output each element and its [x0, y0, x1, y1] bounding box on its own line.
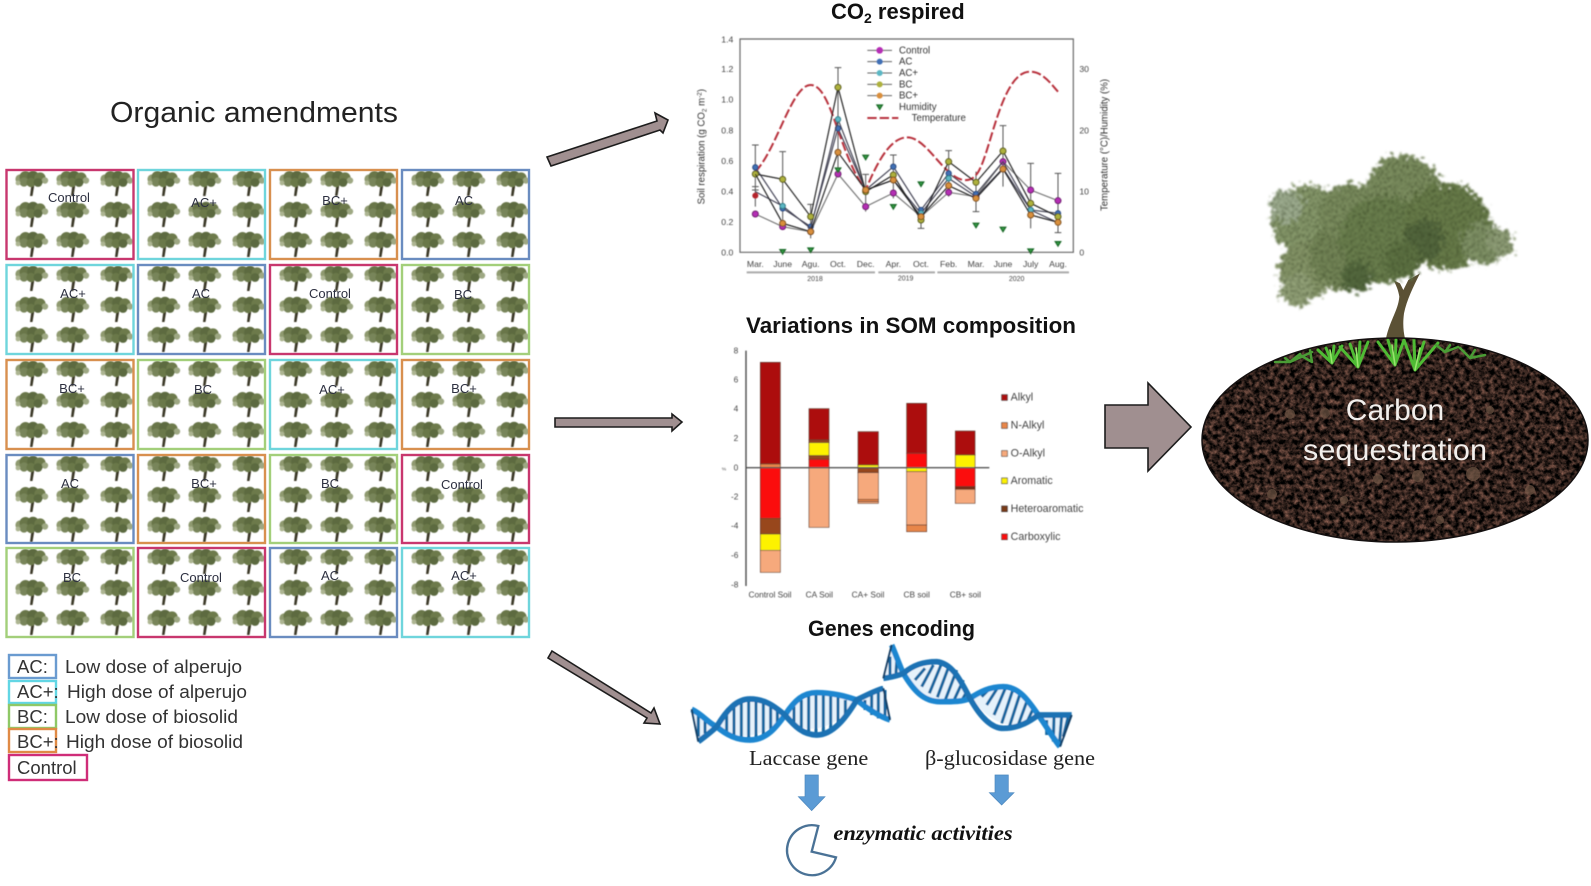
legend: Temperature: [912, 113, 966, 124]
legend: Control: [899, 45, 930, 56]
icon: enzyme pacman: [787, 825, 836, 875]
y axis: 6: [734, 374, 739, 384]
plot: BC r5c1: BC: [63, 570, 81, 585]
x axis labels: Dec.: [857, 259, 875, 269]
plot: Control r5c2: [138, 548, 265, 637]
red point: [752, 193, 758, 199]
x axis labels: Aug.: [1049, 259, 1067, 269]
legend: treatments: AC:: [17, 656, 48, 677]
axis titles: Soil respiration (g CO: [697, 112, 708, 204]
series: BC+: [755, 149, 1061, 235]
series: Humidity: [780, 155, 1061, 254]
axis titles: Temperature (°C)/Humidity (%): [1100, 79, 1111, 211]
x axis labels: Apr.: [886, 259, 901, 269]
y axis: 2: [734, 433, 739, 443]
label: enzymatic activities: enzymatic activities: [833, 823, 1013, 845]
y axis ticks: 1.0: [721, 95, 734, 105]
y axis ticks: 1.4: [721, 34, 734, 44]
plot: AC r2c2: [138, 265, 265, 354]
plot: AC+ r5c4: [402, 548, 529, 637]
arrow: glucosidase down: [989, 775, 1014, 805]
y axis ticks: 0.2: [721, 217, 734, 227]
y axis ticks: [721, 34, 1089, 257]
legend: AC+: [899, 68, 918, 79]
plot: BC+ r3c4: BC+: [451, 381, 477, 396]
plot: Control r4c4: [402, 455, 529, 543]
x axis labels: 2018: [807, 276, 823, 283]
x axis labels: June: [994, 259, 1013, 269]
arrow: Laccase down: [798, 775, 825, 811]
x axis labels: 2019: [898, 275, 914, 282]
y axis: [722, 345, 746, 590]
legend: treatments: BC+:: [17, 731, 59, 752]
legend: treatments: [9, 655, 247, 780]
y axis: %: [722, 466, 727, 472]
chart: soil respiration line chart: [697, 34, 1111, 283]
plot: AC r2c2: AC: [192, 286, 210, 301]
x axis labels: Agu.: [802, 259, 820, 269]
plot: Control r2c3: Control: [309, 286, 351, 301]
y axis: -2: [731, 491, 739, 501]
bar: CB soil: [907, 403, 927, 532]
plot: AC+ r5c4: AC+: [451, 568, 477, 583]
heading: CO2 respired: 2: [864, 10, 872, 26]
zero line: [746, 466, 989, 470]
plot: AC+ r1c2: [138, 170, 265, 259]
plot: Control r2c3: [270, 265, 397, 354]
legend: BC: [899, 79, 912, 90]
x axis labels: Mar.: [747, 259, 764, 269]
plot: BC r5c1: [6, 548, 134, 637]
plot: AC r1c4: [402, 170, 529, 259]
legend: treatments: High dose of alperujo: [67, 681, 247, 702]
legend: [1002, 392, 1084, 543]
y axis ticks: 0.8: [721, 125, 734, 135]
panel: field plot grid: [6, 170, 529, 637]
legend: Carboxylic: [1011, 531, 1061, 543]
plot: AC+ r3c3: [270, 360, 397, 449]
axis titles: ): [697, 89, 708, 92]
y axis: 4: [734, 404, 739, 414]
y axis ticks: 0: [1079, 247, 1084, 257]
plot: AC r1c4: AC: [455, 193, 473, 208]
plot: Control r5c2: Control: [180, 570, 222, 585]
heading: Variations in SOM composition: Variations in SOM composition: [746, 313, 1076, 338]
legend: Heteroaromatic: [1011, 503, 1084, 515]
arrow: to SOM composition: [555, 414, 682, 431]
x axis labels: Oct.: [913, 259, 929, 269]
x axis labels: 2020: [1009, 276, 1025, 283]
icon: DNA helix laccase: [692, 688, 890, 742]
legend: Humidity: [899, 102, 937, 113]
x labels: CB+ soil: [950, 590, 981, 600]
plot: BC+ r3c4: [402, 360, 529, 449]
legend: O-Alkyl: [1011, 448, 1045, 460]
legend: N-Alkyl: [1011, 420, 1044, 432]
plot: BC+ r4c2: [138, 455, 265, 543]
heading: Genes encoding: Genes encoding: [808, 616, 975, 641]
plot: AC+ r2c1: AC+: [60, 286, 86, 301]
plot: AC+ r1c2: AC+: [191, 195, 217, 210]
legend: treatments: Low dose of alperujo: [65, 656, 242, 677]
label: Laccase gene: Laccase gene: [749, 748, 868, 770]
y axis: 0: [734, 462, 739, 472]
plot: BC r3c2: BC: [194, 382, 212, 397]
y axis ticks: 0.6: [721, 156, 734, 166]
plot: BC r2c4: [402, 265, 529, 354]
x axis labels: Oct.: [830, 259, 846, 269]
plot: Control r1c1: [6, 170, 134, 259]
y axis: -6: [731, 550, 739, 560]
x labels: CB soil: [903, 590, 930, 600]
series: BC: [752, 84, 1061, 223]
illustration: soil ellipse: [1195, 335, 1591, 547]
arrow: to carbon sequestration: [1105, 383, 1191, 471]
y axis ticks: 30: [1079, 64, 1089, 74]
plot: AC+ r3c3: AC+: [319, 382, 345, 397]
legend: BC+: [899, 91, 918, 102]
plot: BC+ r3c1: BC+: [59, 381, 85, 396]
plot: Control r1c1: Control: [48, 190, 90, 205]
axis titles: m: [697, 98, 708, 109]
legend: AC: [899, 57, 912, 68]
bar: CA+ Soil: [858, 432, 878, 503]
tree canopy: [1270, 155, 1513, 307]
x labels: Control Soil: [748, 590, 792, 600]
bar: CA Soil: [809, 409, 829, 527]
y axis ticks: 0.4: [721, 186, 734, 196]
chart: SOM composition stacked bars: [722, 345, 1084, 600]
plot: BC+ r3c1: [6, 360, 134, 449]
y axis: -4: [731, 521, 739, 531]
legend: Alkyl: [1011, 392, 1033, 404]
grass: [1275, 340, 1485, 370]
y axis ticks: 0.0: [721, 247, 734, 257]
panel: genes: [692, 645, 1095, 875]
tree trunk: [1386, 273, 1420, 338]
icon: DNA helix beta-glucosidase: [883, 645, 1072, 747]
plot: AC r5c3: AC: [321, 568, 339, 583]
arrow: to CO2 respired: [547, 113, 668, 166]
y axis ticks: 20: [1079, 125, 1089, 135]
temperature line: [755, 72, 1058, 190]
label: beta-glucosidase gene: β-glucosidase gene: [925, 748, 1095, 770]
bar: CB+ soil: [955, 431, 975, 503]
x labels: CA+ Soil: [852, 590, 884, 600]
plot frame: [740, 39, 1073, 252]
arrow: to genes encoding: [548, 651, 660, 724]
label: Carbon sequestration: [1303, 394, 1487, 467]
legend: treatments: Low dose of biosolid: [65, 706, 238, 727]
plot: BC+ r4c2: BC+: [191, 476, 217, 491]
plot: Control r4c4: Control: [441, 477, 483, 492]
legend: treatments: Control: [17, 757, 77, 778]
series: Control: [752, 159, 1061, 235]
axis titles: 2: [701, 108, 708, 112]
x axis labels: Feb.: [940, 259, 957, 269]
x labels: [748, 590, 981, 600]
plot: AC r4c1: AC: [61, 476, 79, 491]
label: Carbon sequestration: Carbon: [1346, 394, 1444, 427]
plot: AC r5c3: [270, 548, 397, 637]
plot: AC+ r2c1: [6, 265, 134, 354]
axis titles: [697, 79, 1111, 211]
legend: treatments: AC+:: [17, 681, 59, 702]
label: Carbon sequestration: sequestration: [1303, 434, 1487, 467]
legend: treatments: High dose of biosolid: [66, 731, 243, 752]
plot: AC r4c1: [6, 455, 134, 543]
x labels: CA Soil: [806, 590, 833, 600]
plot: BC+ r1c3: [270, 170, 397, 259]
axis titles: -2: [697, 92, 704, 98]
series: AC: [753, 126, 1061, 229]
series: AC+: [755, 117, 1058, 228]
legend: treatments: BC:: [17, 706, 48, 727]
x axis labels: Mar.: [968, 259, 984, 269]
y axis: -8: [731, 580, 739, 590]
plot: BC r4c3: [270, 455, 397, 543]
y axis ticks: 10: [1079, 186, 1089, 196]
plot: BC r2c4: BC: [454, 287, 472, 302]
legend: [867, 45, 980, 124]
error bars: [752, 68, 1061, 238]
legend: Aromatic: [1011, 475, 1053, 487]
bar: Control Soil: [760, 362, 780, 572]
soil texture: [1195, 335, 1591, 547]
title: Organic amendments: Organic amendments: [110, 97, 398, 129]
plot: BC+ r1c3: BC+: [322, 193, 348, 208]
x axis labels: June: [773, 259, 792, 269]
plot: BC r3c2: [138, 360, 265, 449]
illustration: olive tree: [1270, 155, 1513, 338]
y axis ticks: 1.2: [721, 64, 734, 74]
x axis labels: July: [1023, 259, 1039, 269]
plot: BC r4c3: BC: [321, 476, 339, 491]
x axis labels: [747, 259, 1069, 283]
y axis: 8: [734, 345, 739, 355]
